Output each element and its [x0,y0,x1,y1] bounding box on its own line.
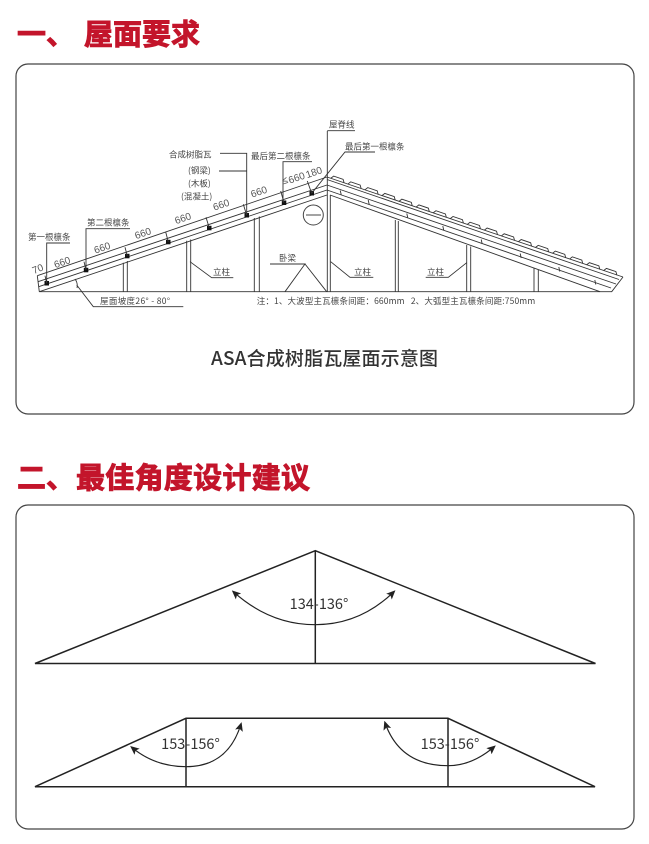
panel: roof schematic [16,64,634,414]
label: first purlin: 第一根檩条 [28,231,71,243]
label: ridge line: 屋脊线 [329,118,355,130]
arc arrow [233,592,394,625]
label: ring beam [270,252,327,292]
dimension labels: 660 [53,255,73,271]
dimension labels: 660 [250,185,269,201]
left posts [123,216,259,292]
label: ring beam: 卧梁 [279,252,297,264]
angle label: 134-136° [290,593,348,614]
schematic caption: ASA合成树脂瓦屋面示意图 [211,344,438,371]
dimension labels: ≤ [281,175,290,187]
left roof slope lines [37,177,327,292]
label: resin tile and layers: (钢梁) [188,164,211,176]
heading: section one [17,12,200,54]
trapezoid diagram [35,718,595,787]
triangle diagram [35,551,596,664]
label: post 1: 立柱 [213,266,231,278]
label: second purlin: 第二根檩条 [87,216,130,228]
left arc arrow [132,724,241,767]
label: resin tile and layers: (木板) [188,178,211,190]
label: roof slope: 屋面坡度26° - 80° [100,295,170,307]
panel frame [16,64,634,414]
label: post 2 [331,262,373,278]
right arc arrow [385,723,494,766]
label: post 1 [190,262,233,278]
right slope purlin clips [340,190,596,284]
note: 注：1、大波型主瓦檩条间距：660mm 2、大弧型主瓦檩条间距:750mm [257,295,535,307]
label: last second purlin [251,150,312,202]
label: resin tile and layers [169,148,247,215]
label: first purlin [28,231,71,283]
right posts [395,220,538,292]
dimension labels: 70 [31,262,46,277]
heading: section one: 一、 [17,12,75,54]
dimension ticks [45,181,312,283]
roof tiles on right slope [331,175,618,275]
heading: section two: 二、 [17,455,75,497]
dimension labels: 660 [93,241,113,257]
dimension labels: 660 [287,171,307,187]
right angle label: 153-156° [421,733,479,754]
left angle label: 153-156° [161,733,220,754]
label: post 3 [426,263,467,278]
label: last second purlin: 最后第二根檩条 [251,150,311,162]
panel frame [16,505,634,829]
roof section drawing [37,131,623,292]
panel: best angles [16,505,634,829]
dimension labels: 660 [174,211,193,227]
icon: section circle [303,205,323,225]
dimension labels: 180 [305,165,324,181]
label: last first purlin [312,140,405,193]
dimension labels: 660 [212,198,232,214]
dimension labels: 660 [134,226,153,242]
label: resin tile and layers: (混凝土) [181,190,212,202]
label: post 3: 立柱 [427,266,445,278]
central post [327,131,330,292]
label: roof slope [75,279,183,307]
purlins [44,191,314,286]
dimension labels [31,165,324,277]
base line [39,291,612,293]
label: resin tile and layers: 合成树脂瓦 [169,148,212,160]
label: second purlin [86,216,130,270]
heading: section one: 屋面要求 [84,12,200,54]
right roof slope lines [327,177,623,292]
label: last first purlin: 最后第一根檩条 [345,140,405,152]
label: post 2: 立柱 [354,266,372,278]
heading: section two: 最佳角度设计建议 [76,455,310,497]
